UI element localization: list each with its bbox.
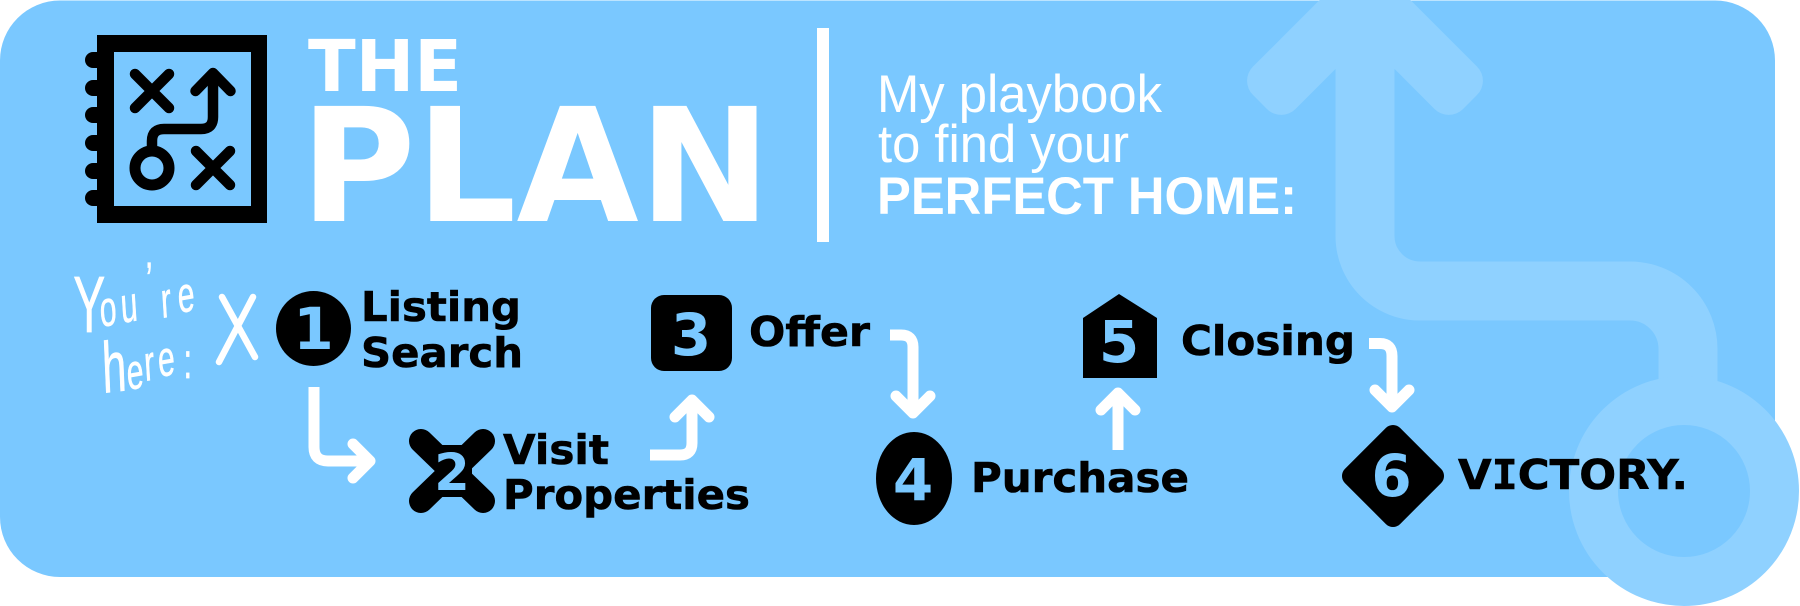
title: THE: THE [308, 25, 462, 108]
handwritten note: You're here: : [184, 333, 192, 389]
background arrow path [1239, 0, 1774, 582]
arrow: step 1 to 2 [314, 387, 370, 478]
title: PLAN: PLAN [300, 75, 771, 259]
step 5: Closing: Closing [1181, 317, 1355, 365]
handwritten note: You're here: u [119, 275, 139, 334]
step 6: VICTORY: 6 [1371, 442, 1412, 510]
step 3: Offer: 3 [671, 301, 711, 369]
handwritten note: You're here: ’ [146, 252, 152, 308]
step 2: Visit Properties: 2 [434, 444, 470, 503]
step 6: VICTORY: VICTORY. [1458, 451, 1688, 499]
step 5: Closing [1083, 294, 1355, 378]
step 3: Offer [651, 295, 871, 371]
step 2: Visit Properties [421, 426, 750, 519]
handwritten note: You're here: o [98, 279, 118, 338]
step 6: VICTORY [1338, 421, 1688, 531]
step 3: Offer: Offer [749, 308, 871, 356]
step 1: Listing Search: 1 [293, 295, 334, 363]
icon: playbook notebook [85, 35, 267, 223]
subtitle text block: to find your [878, 115, 1129, 174]
handwritten note: You're here: e [176, 265, 196, 324]
arrow: step 4 to 5 [1101, 393, 1135, 450]
step 4: Purchase [876, 432, 1189, 525]
arrow: step 3 to 4 [890, 335, 930, 413]
handwritten note: You're here: r [159, 272, 173, 329]
step 1: Listing Search [276, 283, 523, 377]
handwritten note: You're here: Y [73, 259, 105, 349]
handwritten note: You're here: e [156, 329, 176, 388]
handwritten note: You're here: h [100, 325, 128, 409]
step 1: Listing Search: Search [361, 329, 523, 377]
handwritten note: You're here: e [125, 342, 145, 401]
handwritten note: You're here [73, 252, 196, 409]
step 1: Listing Search: Listing [361, 283, 521, 331]
step 4: Purchase: 4 [893, 446, 933, 514]
step 4: Purchase: Purchase [971, 454, 1189, 502]
subtitle text block: My playbook [877, 65, 1162, 124]
subtitle text block [877, 65, 1297, 226]
subtitle text block: PERFECT HOME: [877, 167, 1297, 226]
arrow: step 5 to 6 [1369, 344, 1409, 407]
step 5: Closing: 5 [1099, 308, 1139, 376]
vertical divider [817, 28, 829, 242]
arrow: step 2 to 3 [650, 400, 709, 455]
handwritten note: You're here: r [142, 335, 156, 392]
icon: X marks the spot [219, 297, 255, 362]
step 2: Visit Properties: Properties [503, 471, 750, 519]
step 2: Visit Properties: Visit [503, 426, 609, 474]
